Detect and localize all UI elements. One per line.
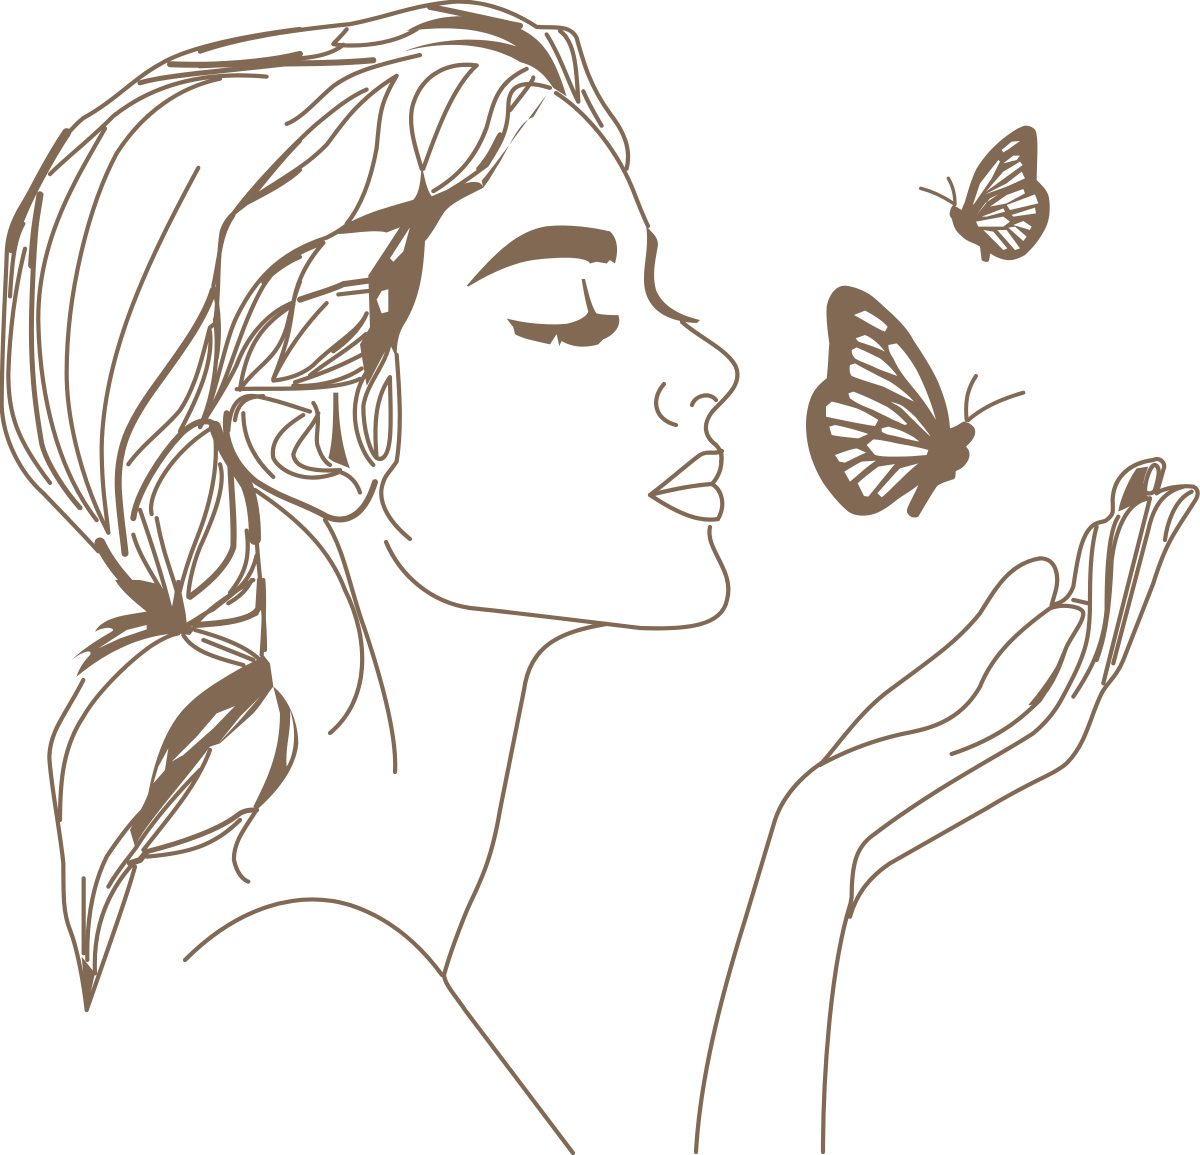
- hair: ponytail knot and tail: [49, 580, 298, 1010]
- eyebrow: [467, 225, 617, 287]
- closed eye and lashes: [507, 279, 619, 347]
- small butterfly: [921, 126, 1050, 262]
- hair: crown and temple strands: [200, 2, 628, 427]
- hair: left flowing strands: [2, 29, 300, 650]
- hair: ear and surrounding strands: [226, 341, 410, 539]
- large butterfly: [806, 286, 1023, 518]
- hand and arm: [696, 459, 1198, 1152]
- neck and shoulder: [185, 490, 606, 1153]
- face: forehead, nose, lips and chin profile: [386, 93, 737, 628]
